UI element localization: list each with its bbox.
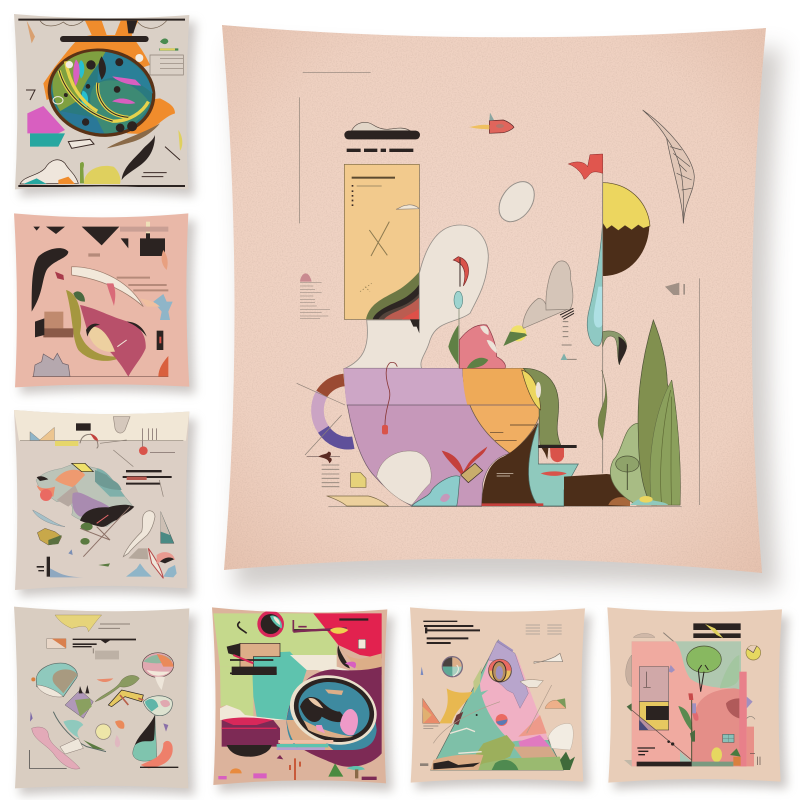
right bubble: [143, 696, 172, 716]
panel: beige pillow with floating bubbles, bottom left: [14, 607, 196, 795]
dark sweeping tail: [122, 135, 155, 180]
panel: large featured pillow with teacup artwork: [215, 20, 782, 590]
black boxes: [121, 232, 165, 256]
bars: [123, 470, 172, 485]
silver crystal: [33, 353, 70, 377]
orange blobs: [43, 21, 150, 100]
pink ribbon: [32, 727, 80, 769]
yellow block and connector: [108, 690, 143, 707]
feather, rock and trees: [33, 510, 65, 527]
white cloud lower: [548, 724, 573, 750]
black bar: [60, 36, 149, 42]
top and bottom bars: [18, 19, 185, 187]
peach dome: [545, 700, 566, 708]
olive hair and yellow ear: [522, 368, 561, 445]
potted plant: [733, 757, 741, 766]
yellow top shape: [55, 615, 102, 632]
red pin and sprig: [55, 272, 64, 280]
brown figure and teal shape: [482, 422, 630, 506]
magenta and teal boxes: [27, 106, 65, 133]
sail and wave: [148, 548, 163, 578]
lilac window: [639, 667, 669, 702]
steam cloud: [345, 225, 488, 368]
striped boxes: [526, 625, 562, 634]
diamond collage: [65, 690, 93, 718]
top circle target: [257, 611, 284, 637]
bottom left scribble: [20, 160, 78, 184]
olive crescent: [66, 290, 123, 361]
lower text block with bird: [307, 452, 340, 487]
bar group: [73, 639, 136, 647]
black triangles: [33, 227, 119, 245]
orbs on mountain: [489, 659, 511, 682]
black blob: [32, 248, 68, 312]
left small text block with dome: [300, 273, 330, 319]
right side details: [157, 331, 163, 350]
green tree: [668, 646, 721, 692]
blue bird: [153, 294, 173, 320]
bottom left marks: [47, 557, 50, 577]
small teal window: [723, 734, 734, 742]
feather: [643, 110, 694, 223]
title bar with cloud: [344, 122, 420, 152]
tower right: [726, 672, 755, 766]
yellow oval: [711, 747, 722, 762]
bottom black bar: [637, 762, 692, 766]
panel: tan pillow with pink house, bottom right: [607, 607, 789, 789]
black curves right: [337, 645, 350, 668]
mountain triangle: [431, 640, 563, 770]
panel: pink pillow with crimson shape, left middle: [14, 213, 195, 394]
teal drop with black: [133, 715, 157, 761]
heading bars: [423, 621, 480, 644]
brown stairs: [43, 312, 73, 337]
white tube figure: [123, 511, 155, 557]
small chart label: [665, 283, 685, 295]
bubble: right globe: [142, 653, 174, 690]
wavy lines: [230, 622, 340, 673]
yellow and black window: [639, 702, 669, 730]
cream arc: [72, 267, 143, 307]
small diagrams: [150, 55, 183, 75]
white cloud top: [534, 653, 563, 663]
green plant: [560, 752, 575, 770]
red claw and brush: [412, 447, 543, 506]
teacup: [344, 362, 541, 506]
cream ground shape: [327, 496, 388, 506]
panel: tan pillow with triangle mountain, bottom right centre: [410, 607, 591, 789]
green leaves and tree: [610, 320, 680, 505]
left blob: [626, 655, 632, 687]
top diagrams: [30, 432, 41, 441]
circle chart: [442, 657, 462, 677]
yellow document icon: [351, 473, 366, 487]
mountain clouds and sun: [503, 261, 577, 360]
scribbled top clouds: [40, 21, 167, 28]
abstract collage: [36, 463, 134, 527]
background cloud and line: [633, 633, 655, 637]
plum block and black shape: [222, 720, 280, 747]
black header bars: [693, 623, 741, 638]
bubble: left swirl: [31, 663, 77, 697]
colour fields: [213, 613, 337, 667]
panel: colourful pillow with porthole, bottom centre: [212, 607, 394, 792]
egg shape: [492, 175, 542, 228]
kite rectangle: [47, 639, 66, 648]
flower stem: [678, 693, 699, 766]
diagonal line with dots: [632, 710, 692, 762]
teal triangle: [161, 512, 174, 543]
small plane: [520, 680, 543, 687]
bottom strip items: [230, 768, 242, 773]
pink house: [632, 641, 747, 766]
frame lines: [299, 72, 700, 507]
sage green wall: [632, 641, 741, 766]
panel: pillow with oval mosaic, top left: [14, 14, 196, 197]
yellow moon: [84, 166, 120, 184]
curled leaf: [598, 331, 627, 440]
thin lines: [433, 685, 552, 743]
cup handle: [297, 380, 353, 455]
coral tube: [141, 741, 173, 768]
pale circle: [96, 724, 111, 739]
pink flower and sprigs: [448, 325, 505, 368]
cream band: [14, 410, 189, 441]
red small triangle: [423, 698, 440, 723]
crimson shape: [80, 305, 146, 377]
flagpole with sun: [568, 154, 650, 473]
yellow flag shape: [439, 688, 473, 723]
yellow poster panel: [344, 164, 419, 319]
pie chart icon: [746, 645, 761, 660]
rocket: [469, 113, 514, 133]
sweeping arc with teal wedge: [53, 712, 106, 752]
panel: beige pillow with cream band, left lower: [14, 410, 196, 597]
plum sweep and porthole: [287, 667, 382, 767]
teacup artwork: [297, 72, 700, 507]
oval mosaic: [48, 48, 156, 137]
